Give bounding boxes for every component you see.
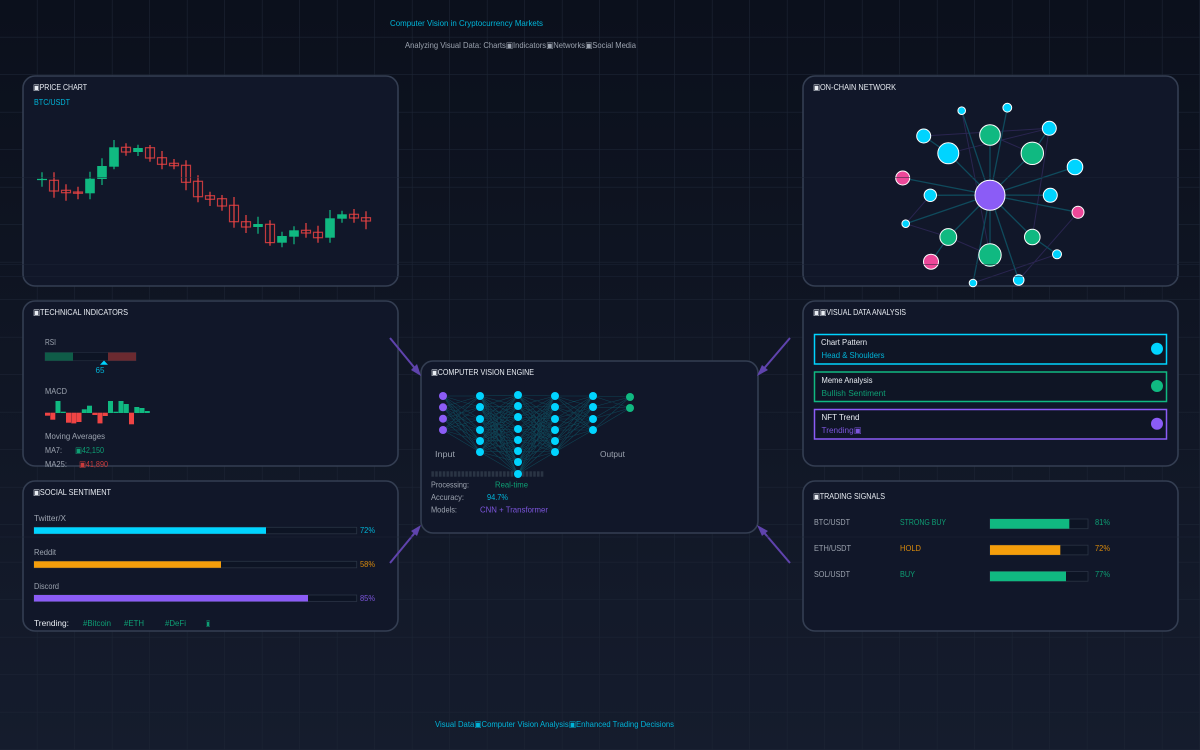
pair label: BTC/USDT bbox=[34, 97, 70, 107]
card: NFT trend: Trending▣ bbox=[822, 425, 862, 435]
moving averages: MA25: bbox=[45, 459, 67, 469]
card: NFT trend bbox=[814, 410, 1166, 439]
panel: visual data analysis bbox=[803, 301, 1178, 466]
price chart heading: ▣PRICE CHART bbox=[33, 82, 87, 92]
signal: BTC: STRONG BUY bbox=[900, 517, 946, 527]
sentiment row: Twitter bbox=[34, 513, 375, 535]
trading signals heading: ▣TRADING SIGNALS bbox=[813, 491, 885, 501]
signal: BTC: BTC/USDT bbox=[814, 517, 850, 527]
trending tags bbox=[34, 618, 210, 628]
panel: social sentiment: ▣ bbox=[206, 618, 210, 628]
sentiment row: Twitter: Twitter/X bbox=[34, 513, 66, 523]
engine stats: Processing: bbox=[431, 480, 469, 490]
signal: SOL: SOL/USDT bbox=[814, 569, 850, 579]
engine stats: Models: bbox=[431, 504, 457, 514]
arrow: analysis to engine bbox=[757, 338, 790, 376]
signal: SOL: BUY bbox=[900, 569, 915, 579]
moving averages: Moving Averages bbox=[45, 431, 105, 441]
sentiment row: Discord bbox=[34, 581, 375, 603]
engine heading: ▣COMPUTER VISION ENGINE bbox=[431, 367, 534, 377]
signal: ETH: ETH/USDT bbox=[814, 543, 851, 553]
arrow: sentiment to engine bbox=[390, 525, 421, 563]
card: chart pattern: Head & Shoulders bbox=[822, 350, 884, 360]
technical indicators heading: ▣TECHNICAL INDICATORS bbox=[33, 307, 128, 317]
RSI gauge bbox=[45, 352, 136, 375]
neural network diagram bbox=[435, 391, 634, 478]
RSI gauge: 65 bbox=[96, 365, 105, 375]
MACD histogram bbox=[45, 401, 150, 424]
card: chart pattern: Chart Pattern bbox=[821, 337, 867, 347]
network graph bbox=[896, 103, 1084, 287]
panel: on-chain network bbox=[803, 76, 1178, 287]
sentiment row: Reddit: Reddit bbox=[34, 547, 57, 557]
panel: technical indicators bbox=[23, 301, 398, 469]
moving averages: MA7: bbox=[45, 445, 62, 455]
subtitle: Analyzing Visual Data: Charts▣Indicators▣Networks▣Social Media bbox=[405, 40, 636, 50]
signal: SOL: 77% bbox=[1095, 569, 1110, 579]
progress strip bbox=[431, 471, 544, 477]
faint horizontal scan lines bbox=[0, 178, 1200, 537]
arrow: indicators to engine bbox=[390, 338, 421, 376]
card: chart pattern bbox=[814, 334, 1166, 364]
engine stats bbox=[431, 480, 548, 514]
card: meme analysis bbox=[814, 372, 1166, 402]
panel: computer vision engine bbox=[421, 361, 758, 533]
signal: ETH: 72% bbox=[1095, 543, 1110, 553]
signal: BTC: 81% bbox=[1095, 517, 1110, 527]
sentiment row: Reddit: 58% bbox=[360, 559, 375, 569]
engine stats: 94.7% bbox=[487, 492, 508, 502]
signal: ETH bbox=[814, 543, 1110, 555]
social sentiment heading: ▣SOCIAL SENTIMENT bbox=[33, 487, 111, 497]
card: meme analysis: Bullish Sentiment bbox=[822, 388, 886, 398]
moving averages bbox=[45, 431, 108, 469]
engine stats: Accuracy: bbox=[431, 492, 464, 502]
neural network diagram: Output bbox=[600, 449, 626, 459]
card: meme analysis: Meme Analysis bbox=[822, 375, 872, 385]
signal: SOL bbox=[814, 569, 1110, 581]
sentiment row: Reddit bbox=[34, 547, 375, 569]
moving averages: ▣42,150 bbox=[75, 445, 104, 455]
sentiment row: Twitter: 72% bbox=[360, 525, 375, 535]
trending tags: #DeFi bbox=[165, 618, 186, 628]
trending tags: Trending: bbox=[34, 618, 69, 628]
RSI label: RSI bbox=[45, 337, 56, 347]
card: NFT trend: NFT Trend bbox=[822, 412, 860, 422]
sentiment row: Discord: 85% bbox=[360, 593, 375, 603]
signal: BTC bbox=[814, 517, 1110, 529]
moving averages: ▣41,890 bbox=[79, 459, 108, 469]
title: Computer Vision in Cryptocurrency Markets bbox=[390, 18, 543, 28]
panel: social sentiment bbox=[23, 481, 398, 631]
panel: price chart bbox=[23, 76, 398, 286]
neural network diagram: Input bbox=[435, 449, 456, 459]
sentiment row: Discord: Discord bbox=[34, 581, 59, 591]
trending tags: #Bitcoin bbox=[83, 618, 111, 628]
trending tags: #ETH bbox=[124, 618, 144, 628]
MACD label: MACD bbox=[45, 386, 67, 396]
panel: trading signals bbox=[803, 481, 1178, 631]
signal: ETH: HOLD bbox=[900, 543, 921, 553]
footer: Visual Data▣Computer Vision Analysis▣Enhanced Trading Decisions bbox=[435, 719, 674, 729]
on-chain network heading: ▣ON-CHAIN NETWORK bbox=[813, 82, 896, 92]
candlestick chart bbox=[37, 140, 370, 247]
engine stats: Real-time bbox=[495, 480, 528, 490]
engine stats: CNN + Transformer bbox=[480, 504, 548, 514]
arrow: signals to engine bbox=[757, 525, 790, 563]
visual data analysis heading: ▣▣VISUAL DATA ANALYSIS bbox=[813, 307, 906, 317]
